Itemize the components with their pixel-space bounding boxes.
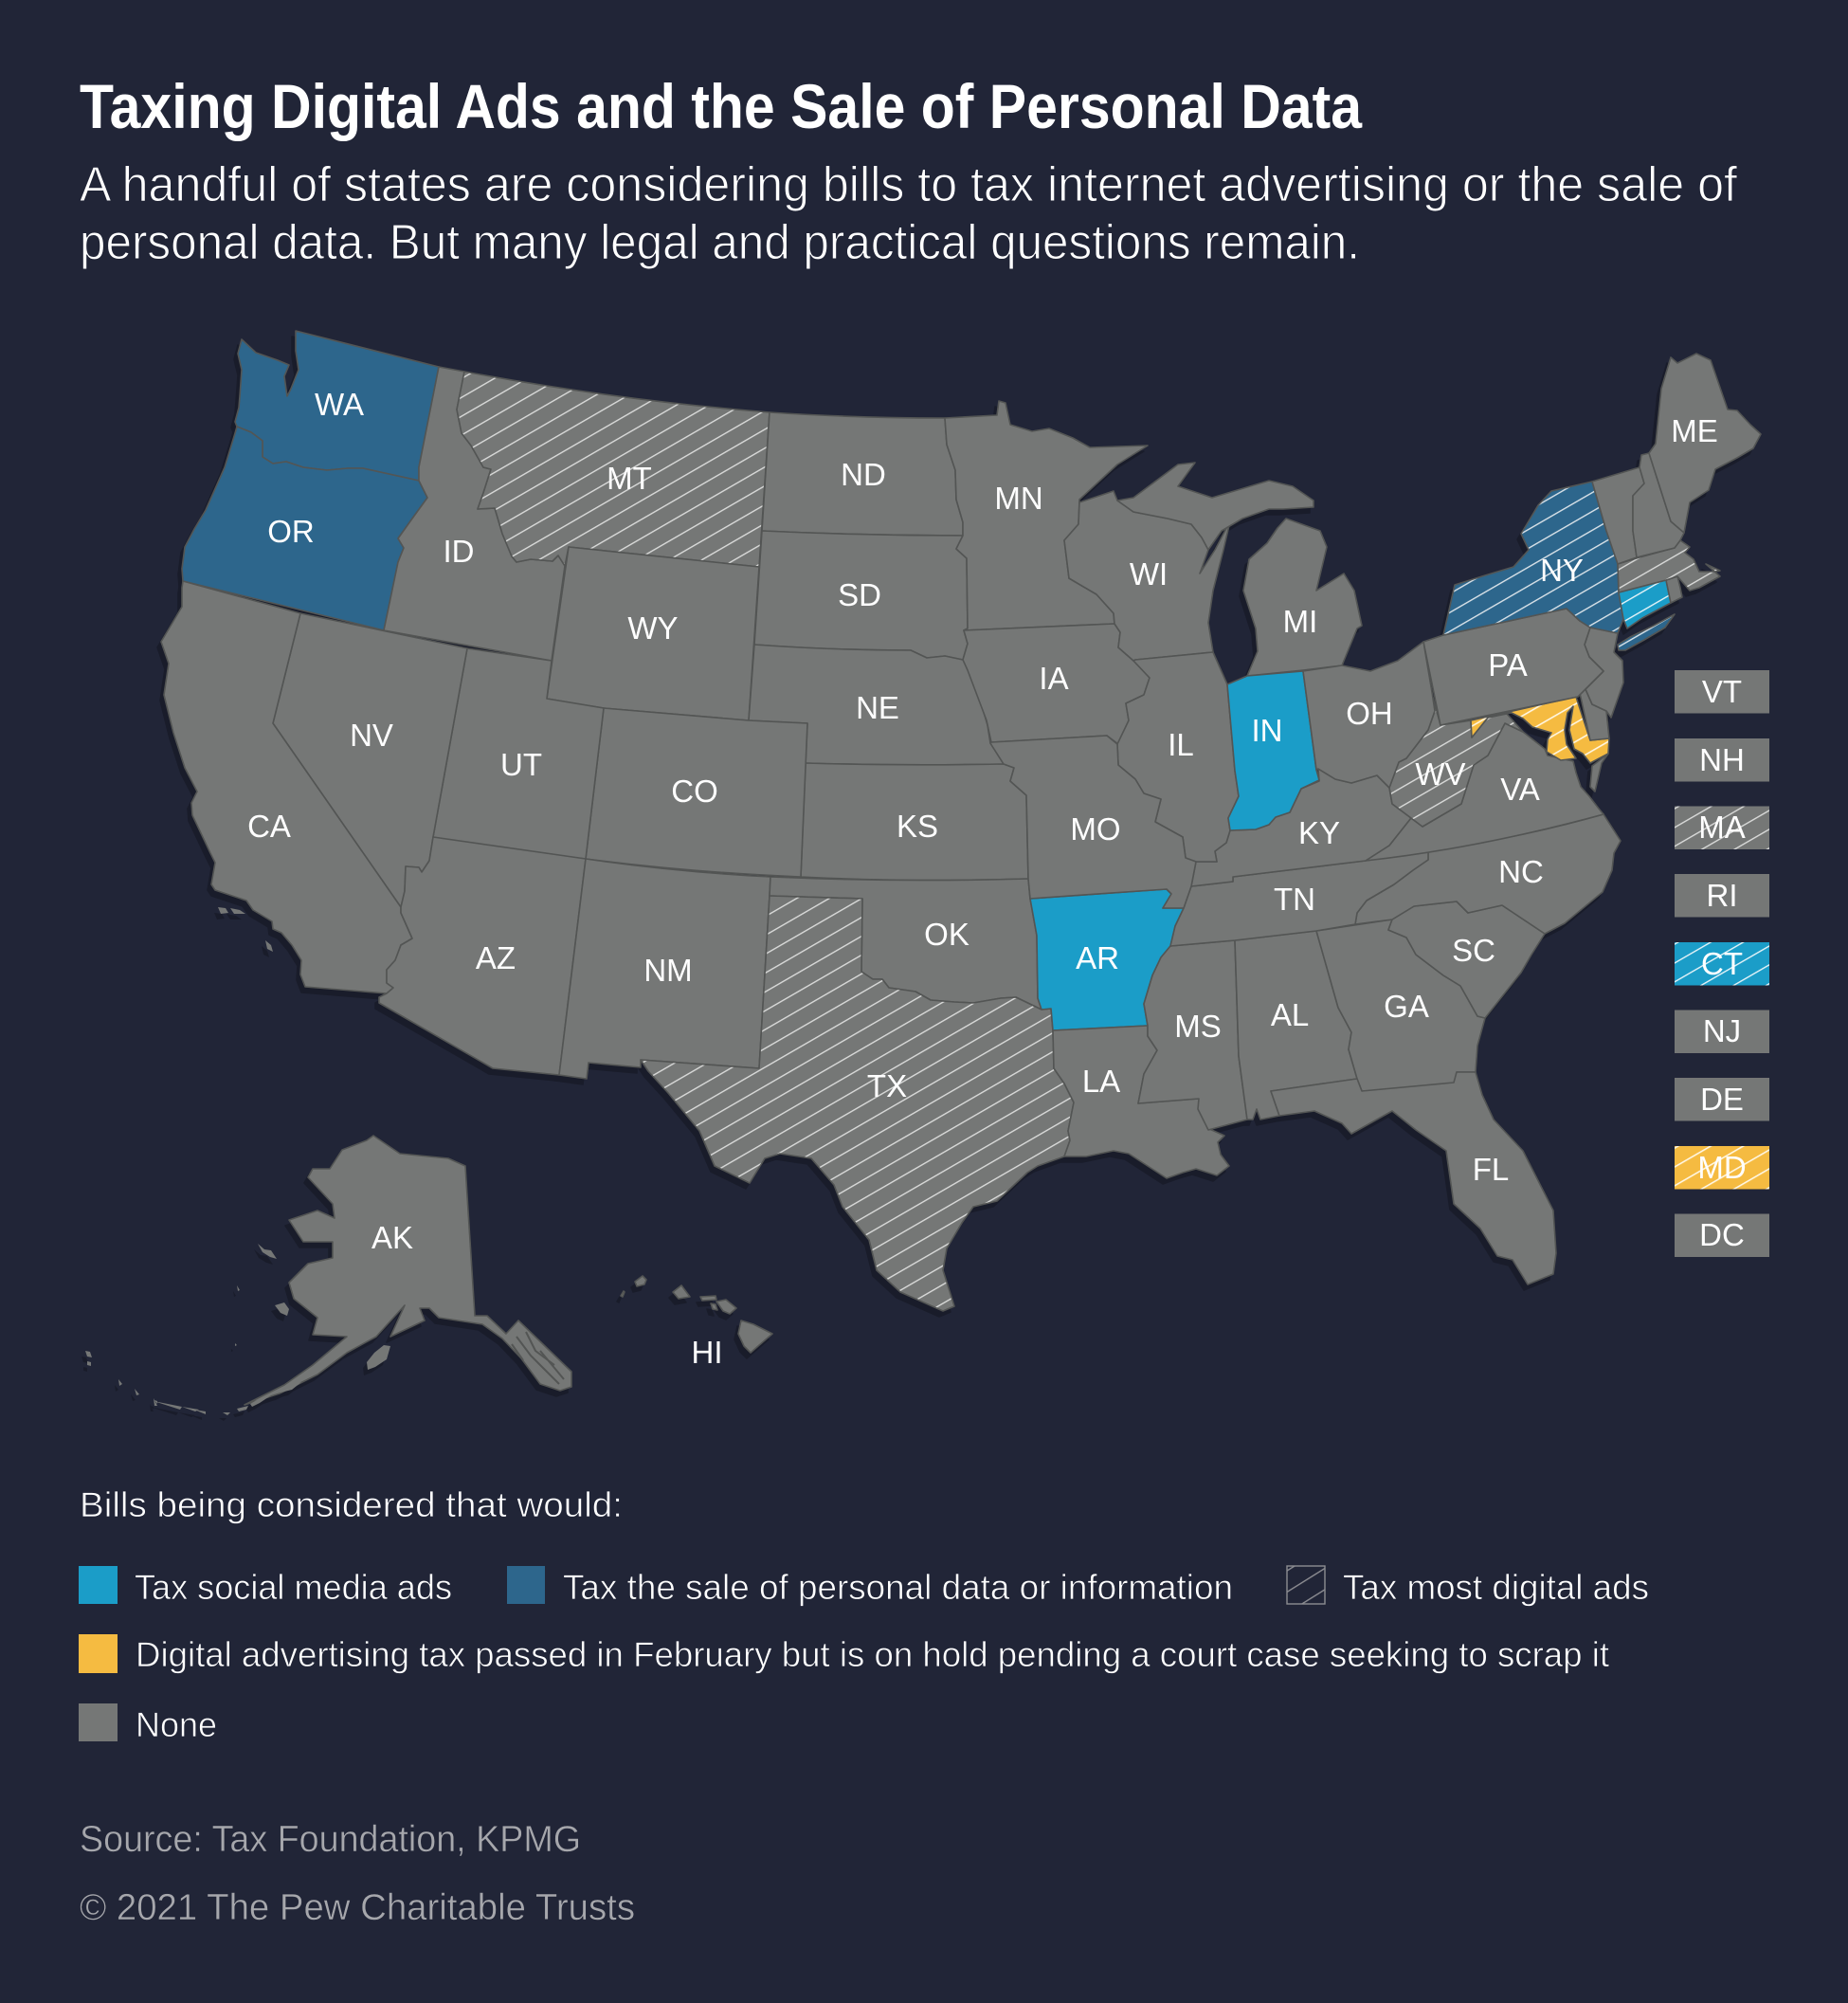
label: VA: VA bbox=[1500, 772, 1540, 807]
state: Georgia bbox=[1316, 920, 1485, 1091]
box: NH bbox=[1675, 738, 1769, 781]
label: KS: KS bbox=[897, 809, 938, 844]
box: VT: VT bbox=[1702, 674, 1742, 709]
state: Michigan lower peninsula bbox=[1243, 519, 1362, 676]
label: PA: PA bbox=[1488, 647, 1528, 683]
label: OH: OH bbox=[1346, 696, 1393, 731]
state: Vermont bbox=[1592, 467, 1644, 564]
state: Maryland bbox=[1471, 697, 1609, 763]
label: WA: WA bbox=[315, 387, 364, 422]
state: Oregon bbox=[182, 427, 427, 630]
state: Arkansas bbox=[1030, 889, 1184, 1030]
state: Nevada bbox=[273, 613, 467, 907]
label: ID: ID bbox=[444, 534, 474, 569]
box: RI: RI bbox=[1706, 878, 1738, 913]
map: state shapes bbox=[85, 331, 1761, 1415]
label: IN: IN bbox=[1251, 713, 1283, 748]
label: KY: KY bbox=[1298, 815, 1340, 850]
islands: California bbox=[218, 907, 273, 952]
box: NH: NH bbox=[1699, 742, 1745, 777]
label: IL: IL bbox=[1168, 727, 1194, 762]
title: Taxing Digital Ads and the Sale of Personal Data bbox=[80, 71, 1363, 141]
label: UT: UT bbox=[500, 747, 542, 782]
state: New York, Long Island bbox=[1618, 614, 1675, 650]
label: SC: SC bbox=[1452, 933, 1495, 968]
state: Ohio bbox=[1303, 642, 1435, 788]
state: Alabama bbox=[1235, 931, 1357, 1120]
state: North Dakota bbox=[762, 412, 963, 536]
label: CO: CO bbox=[671, 774, 718, 809]
subtitle: personal data. But many legal and practical questions remain. bbox=[80, 215, 1360, 270]
state: Oklahoma bbox=[770, 877, 1042, 1010]
state: Louisiana bbox=[1053, 1026, 1229, 1178]
legend bbox=[79, 1566, 1649, 1744]
legend item: tax most digital ads: Tax most digital ads bbox=[1343, 1568, 1649, 1607]
subtitle: A handful of states are considering bills to tax internet advertising or the sale of bbox=[80, 157, 1738, 212]
label: IA: IA bbox=[1039, 661, 1069, 696]
state: Colorado bbox=[586, 708, 807, 877]
copyright: © 2021 The Pew Charitable Trusts bbox=[80, 1887, 635, 1928]
state: Washington bbox=[235, 331, 439, 481]
label: WY: WY bbox=[627, 610, 679, 646]
subtitle bbox=[80, 157, 1738, 270]
label: LA: LA bbox=[1082, 1064, 1120, 1099]
legend item: none bbox=[79, 1703, 217, 1744]
label: AL: AL bbox=[1271, 997, 1309, 1032]
state: New Jersey bbox=[1585, 628, 1623, 718]
label: AK: AK bbox=[371, 1220, 413, 1255]
box: CT: CT bbox=[1701, 946, 1743, 981]
state: Iowa bbox=[963, 624, 1150, 744]
state: Virginia eastern shore bbox=[1590, 754, 1608, 792]
detail: Alaska panhandle channels bbox=[512, 1332, 564, 1384]
label: MI: MI bbox=[1283, 604, 1317, 639]
label: NM: NM bbox=[643, 953, 693, 988]
box: MD bbox=[1675, 1146, 1769, 1189]
state: Wyoming bbox=[547, 547, 759, 720]
state: Missouri bbox=[990, 736, 1196, 908]
label: WV: WV bbox=[1415, 756, 1466, 792]
state abbreviation labels bbox=[247, 387, 1718, 1370]
state: Mississippi bbox=[1138, 940, 1247, 1130]
box: DE: DE bbox=[1700, 1082, 1744, 1117]
box: MA bbox=[1675, 806, 1769, 849]
state: Alaska bbox=[245, 1136, 571, 1405]
legend item: tax the sale of personal data: Tax the sale of personal data or information bbox=[563, 1568, 1233, 1607]
label: OK: OK bbox=[924, 917, 969, 952]
label: NC: NC bbox=[1498, 854, 1544, 889]
source: Source: Tax Foundation, KPMG bbox=[80, 1819, 581, 1860]
label: MN: MN bbox=[994, 481, 1043, 516]
label: NE: NE bbox=[856, 690, 899, 725]
box: DC bbox=[1675, 1213, 1769, 1257]
state: New York bbox=[1443, 482, 1623, 635]
label: TX: TX bbox=[867, 1068, 907, 1103]
legend item: digital advertising tax passed: Digital advertising tax passed in February but is on hold pending a court case seeking to scrap it bbox=[136, 1635, 1610, 1674]
label: WI: WI bbox=[1130, 556, 1168, 592]
label: NY: NY bbox=[1540, 553, 1584, 588]
state: Idaho bbox=[384, 367, 565, 661]
state: North Carolina bbox=[1355, 814, 1621, 934]
state: Illinois bbox=[1117, 652, 1239, 862]
state: Pennsylvania bbox=[1423, 609, 1603, 725]
label: CA: CA bbox=[247, 809, 291, 844]
state: Delaware bbox=[1580, 689, 1609, 740]
state: Texas bbox=[641, 896, 1074, 1311]
state: Nebraska bbox=[749, 645, 1004, 765]
label: TN: TN bbox=[1274, 882, 1315, 917]
small state boxes bbox=[1675, 670, 1769, 1257]
state: Minnesota bbox=[945, 401, 1148, 630]
label: SD: SD bbox=[838, 577, 881, 612]
state: Rhode Island bbox=[1666, 576, 1682, 603]
state: Kentucky bbox=[1191, 769, 1411, 886]
state: South Carolina bbox=[1388, 901, 1545, 1018]
label: GA: GA bbox=[1384, 989, 1429, 1024]
label: NV: NV bbox=[350, 718, 393, 753]
state: Indiana bbox=[1227, 671, 1319, 830]
label: MO: MO bbox=[1070, 811, 1121, 847]
state: Massachusetts bbox=[1618, 540, 1720, 592]
box: MD: MD bbox=[1697, 1150, 1747, 1185]
state: Tennessee bbox=[1170, 850, 1428, 946]
label: AZ: AZ bbox=[476, 940, 516, 975]
box: NJ bbox=[1675, 1011, 1769, 1053]
islands: Hawaii bbox=[621, 1276, 772, 1353]
state: Connecticut bbox=[1619, 580, 1671, 628]
label: FL: FL bbox=[1473, 1152, 1509, 1187]
box: CT bbox=[1675, 942, 1769, 986]
state: Utah bbox=[433, 648, 604, 859]
legend item: tax social media ads: Tax social media ads bbox=[135, 1568, 452, 1607]
label: OR: OR bbox=[267, 514, 315, 549]
box: VT bbox=[1675, 670, 1769, 713]
state: Montana bbox=[457, 372, 770, 567]
legend heading: Bills being considered that would: bbox=[80, 1485, 623, 1524]
label: HI: HI bbox=[692, 1335, 722, 1370]
state: Virginia bbox=[1366, 723, 1603, 861]
state: California bbox=[161, 581, 412, 993]
box: MA: MA bbox=[1698, 810, 1746, 845]
state: Kansas bbox=[801, 763, 1028, 881]
label: ME: ME bbox=[1671, 413, 1718, 448]
state: Maine bbox=[1649, 354, 1761, 533]
state: Arizona bbox=[379, 837, 586, 1075]
state: Florida bbox=[1271, 1072, 1556, 1284]
label: AR: AR bbox=[1076, 940, 1119, 975]
state: South Dakota bbox=[754, 531, 968, 660]
state: Michigan upper peninsula bbox=[1117, 463, 1314, 550]
legend item: none: None bbox=[136, 1705, 217, 1744]
box: NJ: NJ bbox=[1703, 1013, 1741, 1048]
box: DE bbox=[1675, 1078, 1769, 1120]
state: West Virginia bbox=[1389, 694, 1523, 827]
state: New Hampshire bbox=[1633, 453, 1684, 557]
label: ND: ND bbox=[841, 457, 886, 492]
islands: Alaska bbox=[85, 1244, 390, 1415]
state: Wisconsin bbox=[1064, 491, 1230, 661]
label: MT: MT bbox=[607, 461, 652, 496]
state: New Mexico bbox=[559, 859, 770, 1079]
box: RI bbox=[1675, 874, 1769, 918]
box: DC: DC bbox=[1699, 1217, 1745, 1252]
label: MS: MS bbox=[1174, 1009, 1222, 1044]
